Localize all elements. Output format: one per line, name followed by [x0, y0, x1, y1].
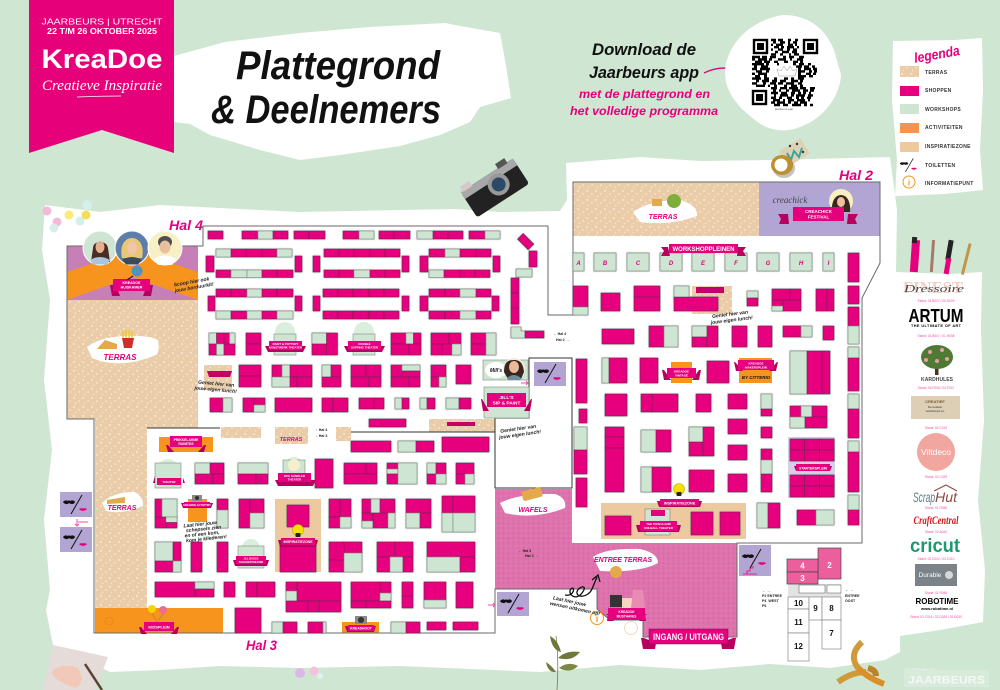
entree terras	[593, 549, 658, 578]
entree west	[762, 589, 783, 608]
banner: creachick festival	[778, 207, 858, 224]
portrait left	[83, 231, 117, 265]
arrow to QR	[704, 66, 738, 73]
pink entrance area	[495, 489, 737, 637]
banner: kreashoot	[345, 625, 376, 632]
workshop pleinen A to I: H	[799, 261, 804, 267]
annotation: geniet left	[193, 379, 238, 395]
stands hal 4 block B	[313, 249, 409, 319]
exhibitor: durable: Stand: 01.R048	[925, 591, 947, 595]
workshop pleinen A to I: F	[734, 261, 738, 267]
workshop pleinen A to I: C	[636, 261, 641, 267]
legend: informatiepunt: INFORMATIEPUNT	[925, 181, 974, 187]
hall 12: 12	[794, 642, 803, 651]
kidsplein area	[95, 608, 223, 633]
stands hal 3 bottom row	[235, 608, 478, 633]
activity blocks	[188, 499, 207, 522]
kreadoe huiskamer area	[67, 246, 198, 300]
pictogram in kidsplein	[105, 617, 113, 625]
bottom confetti	[295, 666, 323, 679]
banner: creachick festival: CREACHICK	[805, 209, 833, 214]
banner: kreadoe musthaves: MUSTHAVES	[617, 614, 636, 618]
small terraces	[204, 365, 232, 390]
icon: shop goods	[610, 590, 645, 608]
hall walls	[67, 182, 880, 637]
stands hal 2 lower rows	[605, 419, 834, 535]
banner: posca uni-ball theater: UNI-BALL THEATER	[644, 526, 674, 530]
hall 8: 8	[829, 604, 834, 613]
app download text	[570, 40, 718, 118]
workshop pleinen A to I: D	[669, 261, 674, 267]
annotation: entrance: wensen uitkomen op!	[549, 601, 601, 617]
legend: terras	[900, 66, 948, 77]
banners	[110, 207, 858, 649]
exhibitor: robotime: Stand: 02.C016 / 02.D026 / 02.D030	[910, 615, 962, 619]
hall labels	[169, 167, 873, 653]
tagline: Creatieve Inspiratie	[42, 78, 162, 94]
theater: hal 3 middle	[283, 457, 305, 484]
banner: prikkelarme ruimtes	[166, 436, 206, 452]
exhibitor: viltdeco	[917, 433, 955, 479]
workshop pleinen A to I	[573, 253, 834, 271]
toilet box bottom	[497, 592, 529, 616]
exhibitor: tree: Stand: 04.F008 / 04.F012	[918, 386, 954, 390]
banner: kidsplein	[139, 622, 179, 634]
theater: paint and pottery	[274, 322, 296, 355]
hall direction 4 to 3: ↑ Hal 4	[316, 428, 327, 432]
icons: balloons	[148, 605, 167, 622]
exhibitor: craft central: CraftCentral	[914, 513, 959, 527]
annotation: geniet left: jouw eigen lunch!	[193, 385, 237, 395]
icon: camera	[458, 154, 529, 217]
exhibitor: artum: THE ULTIMATE OF ART	[911, 324, 962, 328]
hal 4: Hal 4	[169, 217, 203, 233]
creachick festival area	[759, 182, 880, 236]
icon: leaf sprig	[546, 636, 580, 690]
stands hal 2 row two	[602, 326, 834, 347]
exhibitor: tree	[918, 345, 954, 390]
hall direction 4 to 3: ↓ Hal 3	[316, 434, 327, 438]
banner: paint and pottery	[265, 341, 306, 352]
icon: paper lanterns confetti	[42, 200, 92, 232]
banner: workshoppleinen: WORKSHOPPLEINEN	[672, 247, 735, 253]
banner: hal 3 middle theater: THEATER	[288, 478, 302, 482]
workshop pleinen A to I: B	[603, 261, 608, 267]
theater: posca and uni-ball	[645, 509, 670, 535]
banner: hoogstraten theater: THEATER	[162, 480, 176, 484]
mill's area: Mill's	[490, 368, 502, 374]
QR crown	[777, 66, 797, 76]
legend: terras: TERRAS	[925, 70, 948, 76]
hall direction 4 to 2	[553, 332, 569, 342]
stands hal 4 top row	[208, 231, 500, 239]
banner: kreashoot: KREASHOOT	[350, 626, 373, 630]
app download text: Jaarbeurs app	[589, 63, 699, 82]
banner: kreadoe musthaves: KREADOE	[619, 610, 634, 614]
stands hal 4 row 3	[209, 333, 496, 355]
banner: dubble: DOUBLE	[358, 342, 371, 346]
spiral arrow	[565, 575, 600, 597]
banner: inspiratiezone hall 3: INSPIRATIEZONE	[283, 540, 313, 544]
hall 9: 9	[813, 604, 818, 613]
exhibitor: scraphut: Hut	[935, 489, 958, 505]
exhibitor: creatief box	[911, 396, 960, 430]
QR code: jaarbeurs.app	[774, 107, 793, 111]
legend: activiteiten	[900, 123, 963, 133]
icon: camera activity	[192, 495, 202, 501]
banner: jill's sip and paint: SIP & PAINT	[493, 400, 520, 406]
legend: workshops	[900, 104, 961, 114]
annotation: hal 3 activity	[183, 519, 227, 544]
legend panel	[892, 38, 983, 196]
venue line: JAARBEURS | UTRECHT	[42, 16, 162, 26]
terras labels	[87, 194, 697, 578]
exhibitor: scraphut: Stand: 01.R056	[925, 506, 947, 510]
legend: shoppen: SHOPPEN	[925, 88, 952, 94]
exhibitor: creatief box: CREATIEF	[925, 399, 945, 404]
hall 2 block: 2	[827, 561, 832, 570]
mini overview map	[762, 548, 860, 661]
jaarbeurs logo: Let's build bridges and	[905, 667, 935, 671]
annotation: hal 3 activity: en of een kom,	[184, 530, 220, 539]
hall direction 4 to 3	[316, 428, 327, 438]
annotation: geniet hal 2	[709, 309, 753, 326]
banner: small terras hal 2	[696, 287, 724, 293]
hall 11: 11	[794, 618, 803, 627]
annotation: hal 3 activity: Laat hier jouw	[183, 520, 218, 529]
terras hal 3: TERRAS	[108, 505, 137, 512]
exhibitor: creatief box: De leukste	[928, 405, 942, 409]
banner: kreadoe huiskamer	[110, 279, 153, 296]
hall direction 3 to 2: ← Hal 3	[518, 549, 531, 553]
icons: lightbulbs	[292, 484, 684, 537]
app download text: het volledige programma	[570, 104, 718, 118]
exhibitor: finest dressoire: Dressoire	[903, 283, 964, 295]
title line 1: Plattegrond	[236, 44, 441, 88]
icon: markers	[910, 237, 972, 275]
workshop pleinen A to I: G	[766, 261, 771, 267]
exhibitor: scraphut	[913, 485, 958, 510]
photo: creachick festival: creachick	[773, 195, 808, 205]
terras hal 4	[87, 330, 159, 363]
entree oost: ENTREE	[845, 594, 860, 598]
hall direction 4 to 2: ← Hal 4	[553, 332, 566, 336]
banner: posca uni-ball theater	[636, 521, 681, 532]
exhibitor: durable: Durable	[919, 572, 942, 579]
exhibitor: viltdeco: Viltdeco	[921, 447, 951, 457]
entree west: P6	[762, 604, 766, 608]
app download text: met de plattegrond en	[579, 87, 710, 101]
date line: 22 T/M 26 OKTOBER 2025	[47, 27, 158, 36]
orange chevron	[67, 250, 198, 300]
hal 4 terrace	[67, 300, 198, 608]
title line 2: & Deelnemers	[211, 88, 441, 132]
terras hal 3	[102, 492, 143, 512]
theater: bottom	[238, 539, 264, 568]
hall 10: 10	[794, 599, 803, 608]
icon: gold ribbon	[838, 642, 884, 684]
banner: dubble	[344, 341, 385, 352]
sip and paint area	[484, 387, 529, 418]
icon: camera kreashoot	[355, 616, 367, 624]
legend: inspiratiezone	[900, 142, 971, 152]
banner: startersplein	[794, 464, 832, 471]
banner: kreadoe vintage: VINTAGE	[675, 374, 688, 378]
hall 4 block: 4	[800, 562, 805, 570]
banner: kidsplein: KIDSPLEIN	[148, 624, 170, 630]
mini gray connector	[788, 584, 841, 597]
exhibitor: finest dressoire: FINEST	[903, 278, 964, 297]
top terras hall 2	[573, 182, 759, 236]
toilet box hal 4	[534, 362, 566, 386]
entree west: ← →	[762, 589, 770, 593]
exhibitor: robotime	[910, 596, 962, 619]
annotation: hal 3 activity: kom je kliederen!	[186, 534, 227, 544]
exhibitor: cricut: cricut	[910, 536, 961, 557]
banner: creachick festival: FESTIVAL	[808, 214, 829, 220]
stands hal 3 middle row	[155, 496, 475, 532]
mill's area	[483, 360, 528, 380]
photo: mill	[503, 358, 525, 380]
startersplein area	[788, 437, 835, 498]
portraits kreadoe huiskamer	[83, 231, 182, 265]
banner: hal 3 middle theater	[275, 473, 316, 486]
legend: workshops: WORKSHOPS	[925, 107, 961, 113]
toilet box left top	[60, 492, 92, 517]
workshop pleinen A to I: I	[828, 261, 830, 267]
exhibitor: tree: KARDHULES	[921, 377, 954, 383]
hall direction 3 to 2	[518, 549, 538, 558]
exhibitor: viltdeco: Stand: 02.C029	[925, 475, 947, 479]
banner: orange block	[181, 502, 213, 508]
banner: orange block: KREADOE ACTIVITEIT	[183, 503, 211, 507]
exhibitor: durable	[915, 564, 957, 595]
hal 2: Hal 2	[839, 167, 873, 183]
exhibitor: finest dressoire: Stand: 04.B027 / 05.H039	[918, 299, 955, 303]
banner: kreadoe makersplein	[734, 360, 778, 371]
exhibitor: robotime: www.robotime.nl	[920, 606, 953, 611]
banner: jill buggs theater	[233, 556, 269, 566]
exhibitor: artum: Stand: 01.B007 / 01.H038	[918, 334, 955, 338]
banner: posca uni-ball theater: THE POSCA AND	[646, 522, 672, 526]
stands hal 4 row 4	[239, 365, 471, 387]
hal 3: Hal 3	[246, 637, 277, 653]
exhibitor: scraphut: Scrap	[913, 489, 935, 505]
legend: shoppen	[900, 86, 952, 96]
banner: jill's sip and paint	[481, 393, 532, 411]
theaters	[155, 322, 670, 568]
QR code	[725, 15, 841, 130]
banner: hal 3 middle theater: DPC SANDLER	[284, 474, 306, 478]
annotation: geniet middle: Geniet hier van	[500, 424, 537, 435]
hall 7: 7	[829, 629, 834, 638]
stands hal 2 row four	[605, 394, 827, 428]
wafels	[500, 487, 565, 516]
annotation: entrance: Laat hier jouw	[552, 595, 588, 608]
exhibitor: creatief box: Stand: 04.C019	[925, 426, 947, 430]
photo: palette knife card	[43, 645, 108, 690]
annotation: geniet middle: jouw eigen lunch!	[498, 429, 542, 441]
wafels: WAFELS	[518, 507, 548, 514]
annotation: scoop hier: Scoop hier ook	[173, 276, 210, 288]
microphone	[127, 266, 142, 280]
banner: kreadoe makersplein: KREADOE	[748, 362, 764, 366]
portrait right	[148, 231, 182, 265]
label: by citterio: BY CITTERIO	[742, 375, 771, 380]
entree oost: ← →	[845, 588, 853, 592]
banner: startersplein: STARTERSPLEIN	[799, 466, 828, 470]
startersplein stands	[790, 439, 834, 497]
workshop pleinen A to I: E	[701, 261, 706, 267]
banner: paint and pottery: PAINT & POTTERY	[273, 342, 298, 346]
terras hal 2	[633, 194, 697, 223]
annotation: geniet middle	[497, 423, 542, 441]
jaarbeurs logo	[904, 667, 989, 687]
hall 3 block: 3	[800, 574, 805, 583]
title blob	[174, 23, 511, 160]
annotation: scoop hier: jouw borduurkit!	[173, 282, 215, 295]
annotation: scoop hier	[172, 276, 215, 295]
annotation: geniet left: Geniet hier van	[198, 380, 234, 389]
entree oost	[845, 588, 860, 603]
mini terras: TERRAS	[280, 437, 303, 443]
exhibitor: craft central: Stand: 02.A040	[925, 530, 947, 534]
exhibitor: creatief box: workshops en	[926, 409, 945, 413]
toilet box left bottom	[60, 527, 92, 552]
theater: dubble	[353, 322, 375, 355]
stands hal 2 row one	[601, 286, 834, 311]
entree oost: OOST	[845, 599, 856, 603]
icon: info point	[590, 612, 604, 624]
hall direction 3 to 2: Hal 2 →	[525, 554, 538, 558]
brand bookmark	[29, 0, 174, 153]
banner: inspiratiezone hall 2: INSPIRATIEZONE	[664, 501, 696, 505]
legend: activiteiten: ACTIVITEITEN	[925, 125, 963, 131]
inspiratiezone hall 2	[601, 503, 746, 539]
stands hal 4 block C	[420, 249, 500, 319]
legend: informatiepunt: i	[908, 178, 910, 188]
exhibitor: artum: ARTUM	[908, 306, 964, 326]
banner: workshoppleinen	[661, 244, 746, 256]
stands hal 3 row five	[155, 582, 473, 612]
exhibitor: robotime: ROBOTIME	[916, 596, 959, 606]
banner: kreadoe musthaves	[606, 608, 647, 621]
QR finder patterns	[753, 40, 817, 104]
terras hal 2: TERRAS	[649, 214, 678, 221]
icon: round stamp	[624, 622, 638, 634]
banner: small terras right	[447, 422, 475, 426]
banner: dubble: SUPPING THEATER	[351, 346, 379, 350]
app download text: Download de	[592, 40, 696, 59]
banner: paint and pottery: KUNSTWERK THEATER	[269, 346, 303, 350]
annotation: hal 3 activity: schepsels zien	[186, 525, 221, 534]
banner: inspiratiezone hall 3	[278, 538, 318, 547]
stands hal 2 row three	[602, 351, 830, 394]
photo: creachick festival	[773, 189, 853, 213]
stands hal 3 top rows	[195, 437, 489, 488]
legend title: legenda	[913, 42, 961, 66]
banner: ingang uitgang: INGANG / UITGANG	[653, 632, 724, 642]
stands hal 4 right column	[511, 234, 544, 338]
legend: inspiratiezone: INSPIRATIEZONE	[925, 144, 971, 150]
annotations	[172, 276, 753, 617]
entree terras: ENTREE TERRAS	[594, 557, 652, 564]
exhibitor: craft central	[914, 513, 959, 534]
banner: prikkelarme ruimtes: RUIMTES	[178, 442, 194, 446]
portrait middle	[115, 231, 149, 265]
exhibitor: artum	[908, 306, 964, 338]
prikkelarme ruimtes area	[159, 437, 213, 452]
banner: small terras top	[207, 371, 232, 377]
toilets	[60, 362, 771, 616]
banner: kreadoe huiskamer: KREADOE	[123, 281, 141, 285]
legend: informatiepunt	[903, 176, 974, 188]
inspiratiezone hall 3	[275, 499, 321, 572]
pink arrows to toilets	[75, 381, 528, 607]
exhibitor: cricut: Stand: 02.C002 / 03.C010	[918, 557, 955, 561]
KreaDoe logo: KreaDoe	[42, 44, 162, 74]
legend: toiletten: TOILETTEN	[925, 163, 955, 169]
workshop pleinen A to I: A	[575, 261, 581, 267]
banner: hoogstraten theater	[153, 476, 185, 485]
white brush background for the map	[42, 157, 985, 672]
banner: inspiratiezone hall 2	[657, 499, 702, 507]
terras hal 4: TERRAS	[104, 353, 137, 362]
jaarbeurs logo: JAARBEURS	[908, 674, 985, 686]
annotation: geniet hal 2: Geniet hier van	[712, 310, 748, 320]
hall areas	[67, 182, 880, 637]
banner: kreadoe vintage	[662, 368, 701, 380]
icon: washi tape	[771, 138, 810, 178]
annotation: geniet hal 2: jouw eigen lunch!	[710, 315, 753, 326]
banner: jill's sip and paint: JILL'S	[499, 395, 514, 401]
legend: toiletten	[900, 158, 955, 172]
QR modules	[752, 40, 817, 105]
stands hal 3 row four	[155, 542, 475, 572]
entree west: P2 ENTREE	[762, 594, 783, 598]
icon: info point: i	[596, 614, 598, 624]
toilet box entrance	[739, 545, 771, 576]
banner: ingang uitgang	[641, 629, 736, 649]
stands hal 2 right column	[848, 253, 859, 525]
banner: jill buggs theater: SCHILDERTHEATER	[239, 561, 263, 564]
hall direction 4 to 2: Hal 2 →	[556, 338, 569, 342]
exhibitors column	[903, 278, 964, 619]
stands hal 2 left columns	[573, 286, 588, 507]
theater: hal 3 left	[155, 459, 181, 488]
entree west: P4 WEST	[762, 599, 780, 603]
banner: kreadoe makersplein: MAKERSPLEIN	[745, 366, 767, 370]
stands hal 4 block A	[206, 249, 302, 319]
banner: jill buggs theater: JILL BUGGS	[244, 558, 259, 560]
stands hal 4 row 5	[210, 398, 471, 427]
banner: kreadoe vintage: KREADOE	[674, 370, 689, 374]
banner: prikkelarme ruimtes: PRIKKELARME	[174, 438, 199, 442]
banner: kreadoe huiskamer: HUISKAMER	[121, 286, 143, 290]
